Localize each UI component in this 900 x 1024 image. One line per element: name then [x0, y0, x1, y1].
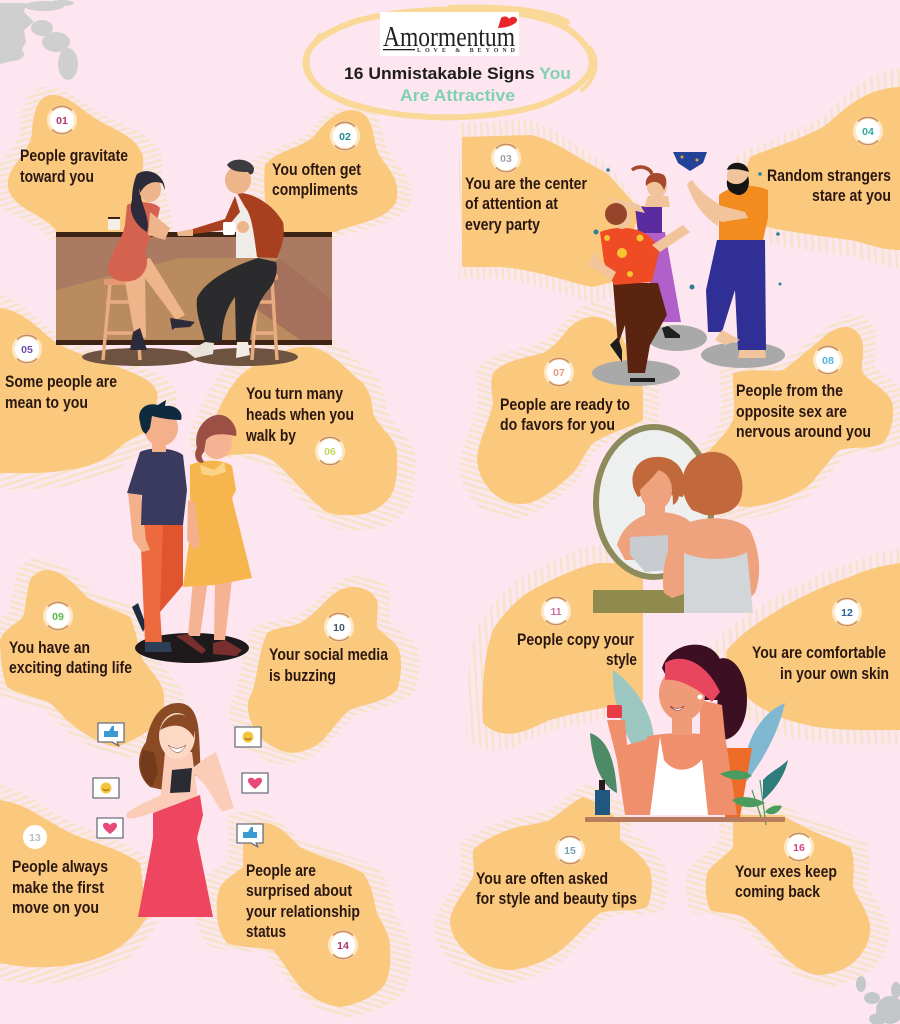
woman in purple: [645, 232, 681, 322]
text 10: [269, 646, 389, 685]
text 16: Your exes keep: [735, 863, 837, 881]
title oval: [305, 8, 596, 117]
badge 10: [324, 612, 354, 642]
text 08: [736, 382, 871, 441]
panel blob 03: [459, 120, 644, 303]
badge 04: 04: [862, 126, 874, 138]
text 02: You often get: [272, 161, 361, 179]
badge 09: 09: [52, 611, 64, 623]
panel blob 16: [686, 804, 889, 986]
text 06: [245, 385, 354, 445]
badge 13: 13: [29, 832, 41, 844]
illustration: woman with phone and reaction bubbles: [93, 703, 268, 917]
logo: [380, 12, 519, 56]
badge 02: [330, 121, 360, 151]
text 02: [272, 161, 361, 199]
text 03: [465, 175, 587, 234]
badge 07: [544, 357, 574, 387]
panel blob 10: [229, 575, 419, 765]
badge 06: 06: [324, 446, 336, 458]
panel blob 07: [459, 302, 659, 519]
panel blob 05: [0, 291, 177, 489]
text 13: [12, 858, 108, 917]
text 06: heads when you: [246, 406, 354, 424]
text 05: [5, 373, 117, 412]
text 15: for style and beauty tips: [476, 890, 637, 908]
panel blob 06: [189, 332, 416, 531]
illustration: couple walking: [127, 400, 252, 663]
badge 07: 07: [553, 367, 565, 379]
badge 05: [12, 334, 42, 364]
bubbles: [98, 723, 124, 746]
decorative foliage bottom right: [856, 976, 900, 1024]
text 06: walk by: [245, 427, 297, 445]
text 14: status: [246, 923, 286, 941]
text 03: You are the center: [465, 175, 587, 193]
text 04: [767, 167, 891, 205]
badge 12: [832, 597, 862, 627]
badge 16: [784, 832, 814, 862]
text 05: Some people are: [5, 373, 117, 391]
text 08: nervous around you: [736, 423, 871, 441]
text 01: [20, 147, 128, 186]
badge 10: 10: [333, 622, 345, 634]
text 16: coming back: [735, 883, 821, 901]
text 14: People are: [246, 862, 316, 880]
text 14: [246, 862, 360, 941]
text 09: You have an: [9, 639, 90, 657]
text 10: is buzzing: [269, 667, 336, 685]
logo: LOVE & BEYOND: [417, 48, 516, 54]
badge 12: 12: [841, 607, 853, 619]
text 15: [476, 870, 637, 908]
panel blob 04: [721, 67, 900, 269]
text 07: [500, 396, 630, 434]
illustration: party group of three: [588, 152, 785, 386]
text 08: People from the: [736, 382, 843, 400]
badge 08: 08: [822, 355, 834, 367]
man in orange: [706, 240, 766, 350]
badge 11: [541, 596, 571, 626]
text 03: every party: [465, 216, 541, 234]
panel blob 02: [249, 102, 411, 239]
badge 13: [23, 825, 47, 849]
text 06: You turn many: [246, 385, 344, 403]
badge 08: [813, 345, 843, 375]
badge 04: [853, 116, 883, 146]
text 01: People gravitate: [20, 147, 128, 165]
text 11: style: [606, 651, 637, 669]
panel blob 01: [0, 87, 174, 241]
text 13: People always: [12, 858, 108, 876]
text 10: Your social media: [269, 646, 389, 664]
text 02: compliments: [272, 181, 358, 199]
boy: [132, 603, 146, 632]
badge 03: [491, 143, 521, 173]
text 08: opposite sex are: [736, 403, 847, 421]
badge 01: 01: [56, 115, 68, 127]
woman: [133, 258, 185, 320]
decorative foliage top left: [0, 0, 78, 80]
illustration: woman at mirror: [593, 427, 759, 613]
text 16: [735, 863, 837, 901]
text 14: surprised about: [246, 882, 352, 900]
man in red shirt: [613, 283, 667, 373]
badge 03: 03: [500, 153, 512, 165]
title: [344, 64, 571, 105]
stool left: [103, 284, 140, 360]
badge 01: [47, 105, 77, 135]
badge 06: [315, 436, 345, 466]
badge 09: [43, 601, 73, 631]
text 14: your relationship: [246, 903, 360, 921]
man: [197, 258, 277, 342]
text 07: do favors for you: [500, 416, 615, 434]
text 13: make the first: [12, 879, 104, 897]
text 12: [752, 644, 889, 683]
panel blob 12: [707, 547, 900, 745]
text 11: [517, 631, 637, 669]
text 01: toward you: [20, 168, 94, 186]
panel blob 09: [0, 557, 184, 759]
badge 15: 15: [564, 845, 576, 857]
illustration: couple at a bar: [56, 160, 332, 366]
panel blob 13: [0, 783, 157, 984]
panel blob 08: [680, 314, 900, 520]
text 09: [9, 639, 132, 677]
text 09: exciting dating life: [9, 659, 132, 677]
text 07: People are ready to: [500, 396, 630, 414]
illustration: woman applying skincare: [585, 645, 788, 825]
panel blob 11: [466, 546, 643, 750]
girl: [188, 580, 208, 636]
badge 14: 14: [337, 940, 349, 952]
stool right: [252, 280, 277, 360]
badge 11: 11: [550, 606, 562, 618]
panel blob 15: [434, 783, 668, 984]
text 15: You are often asked: [476, 870, 608, 888]
text 13: move on you: [12, 899, 99, 917]
badge 05: 05: [21, 344, 33, 356]
title: 16 Unmistakable Signs You: [344, 64, 571, 83]
panel blob 14: [195, 811, 411, 1017]
badge 16: 16: [793, 842, 805, 854]
badge 15: [555, 835, 585, 865]
logo: Amormentum: [383, 21, 515, 53]
text 11: People copy your: [517, 631, 634, 649]
text 03: of attention at: [465, 195, 558, 213]
badge 02: 02: [339, 131, 351, 143]
badge 14: [328, 930, 358, 960]
text 05: mean to you: [5, 394, 88, 412]
title: Are Attractive: [400, 86, 515, 105]
